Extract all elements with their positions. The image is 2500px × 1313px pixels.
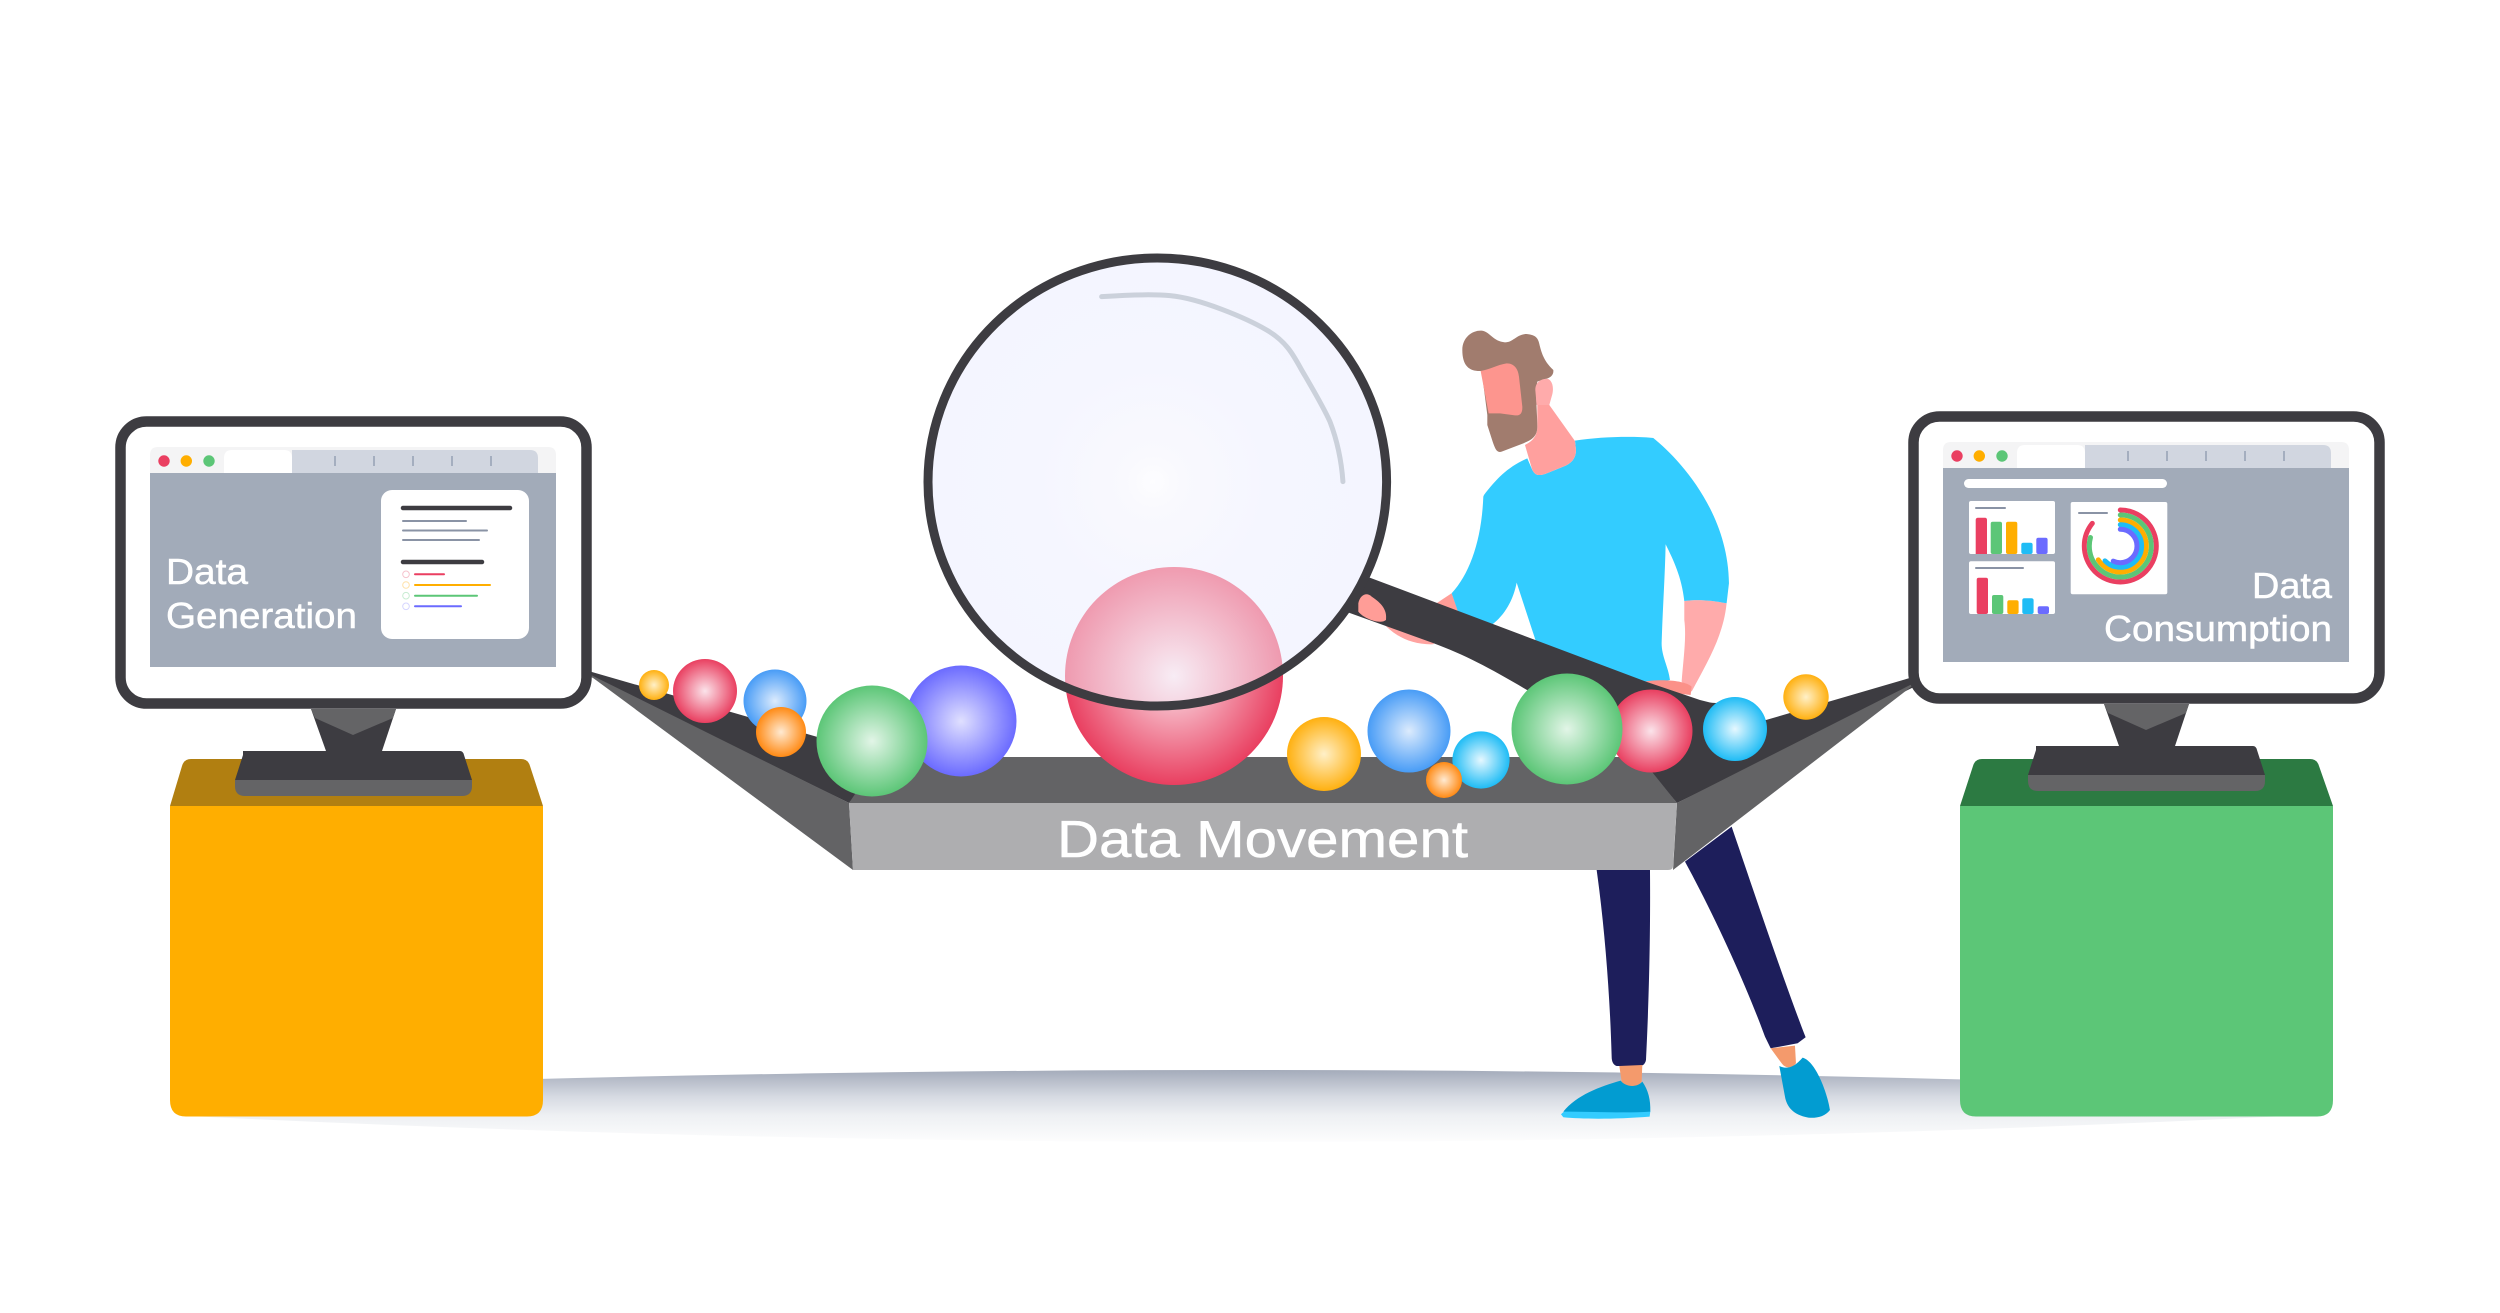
lens ring	[928, 258, 1387, 706]
label: data generation: Data	[166, 551, 249, 592]
label: data generation: Generation	[166, 595, 357, 636]
bar chart card 1	[1969, 501, 2055, 554]
right hand on handle	[1645, 680, 1692, 695]
screen	[150, 473, 556, 667]
label: data movement: Data Movement	[1057, 811, 1469, 869]
magnifier lens	[924, 254, 1392, 710]
radial chart card	[2071, 502, 2167, 594]
bar chart card 2	[1969, 561, 2055, 614]
monitor frame	[1914, 416, 2380, 698]
document card	[381, 490, 529, 639]
monitor: data consumption	[1914, 416, 2380, 791]
platform: data movement	[585, 670, 1920, 870]
search bar	[1964, 479, 2167, 488]
monitor stand	[2028, 704, 2265, 791]
label: data consumption: Data	[2252, 565, 2333, 606]
illustration: data pipeline	[115, 254, 2385, 1132]
ground shadow	[188, 1070, 2286, 1142]
magnifier handle	[1347, 577, 1716, 745]
browser bar	[150, 447, 556, 473]
ball seen through lens	[1065, 567, 1282, 702]
left hand on handle	[1358, 594, 1386, 622]
label: data generation	[166, 551, 357, 636]
screen	[1943, 468, 2349, 662]
monitor: data generation	[120, 422, 586, 796]
label: data consumption	[2104, 565, 2333, 649]
legs and shoes	[1561, 827, 1830, 1119]
box: yellow pedestal	[170, 759, 543, 1116]
person: torso and head	[1435, 331, 1729, 692]
magnifier big ball	[1065, 567, 1283, 785]
monitor frame	[120, 422, 586, 704]
box: green pedestal	[1960, 759, 2333, 1116]
monitor stand	[235, 709, 472, 796]
data balls	[639, 659, 1829, 798]
lens highlight	[1102, 295, 1343, 482]
hand under handle	[1382, 610, 1443, 644]
browser bar	[1943, 442, 2349, 468]
label: data consumption: Consumption	[2104, 608, 2332, 649]
